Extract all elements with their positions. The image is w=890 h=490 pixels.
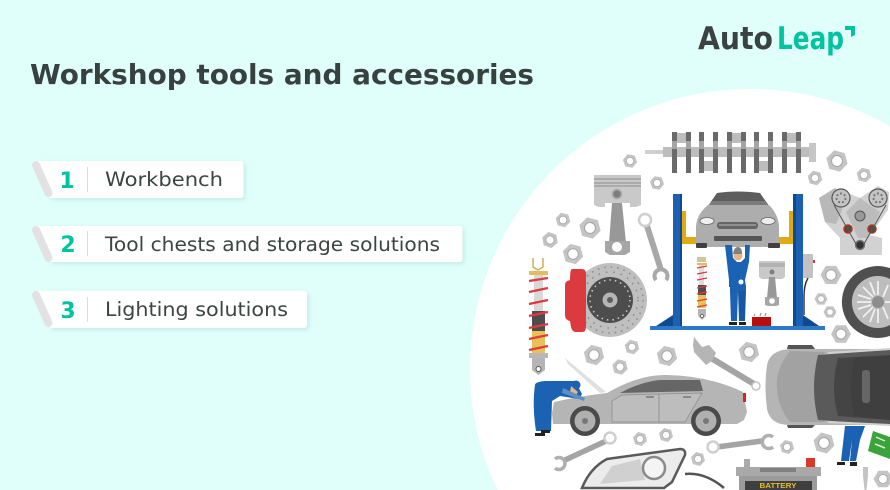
mechanic holding car xyxy=(725,245,750,325)
red toolbox xyxy=(752,313,771,326)
list item 3: Lighting solutions: Lighting solutions xyxy=(105,298,288,321)
list item 2: Tool chests and storage solutions: 2 xyxy=(60,233,76,258)
icon: adjustable wrench xyxy=(693,337,760,390)
icon: car lift with car and mechanic xyxy=(650,192,825,330)
icon: V engine xyxy=(819,186,889,255)
icon: crankshaft xyxy=(645,132,816,173)
list item 3: Lighting solutions xyxy=(36,291,307,328)
car front view xyxy=(696,192,780,248)
icon: large piston xyxy=(594,175,641,255)
icon: coil-over shock absorber xyxy=(529,258,548,375)
small shock absorber xyxy=(697,257,707,320)
icon: open-end wrench, bottom left xyxy=(555,432,616,469)
icon: tyre and alloy wheel xyxy=(842,266,890,338)
icon: probe at bottom right xyxy=(863,467,868,490)
list item 1: Workbench: Workbench xyxy=(105,168,223,191)
icon: small wrench xyxy=(639,214,668,280)
lift frame xyxy=(650,194,825,330)
logo: AutoLeap: Auto xyxy=(698,21,773,57)
title: Workshop tools and accessories xyxy=(30,58,534,91)
icon: car top view xyxy=(766,345,890,428)
icons: hex nuts xyxy=(540,149,890,487)
icon: car battery xyxy=(736,458,821,490)
logo: AutoLeap xyxy=(698,21,855,57)
list item 2: Tool chests and storage solutions xyxy=(36,226,462,262)
mechanic leaning under hood xyxy=(534,380,585,436)
white circle backdrop xyxy=(470,89,890,490)
icon: sedan with open hood xyxy=(552,358,747,436)
icon: open-end wrench, bottom centre xyxy=(708,436,773,452)
list item 1: Workbench xyxy=(36,161,244,198)
mechanic legs and green tool tray xyxy=(837,426,890,466)
icon: car battery: BATTERY xyxy=(760,481,796,490)
list item 1: Workbench: 1 xyxy=(59,169,75,194)
list item 3: Lighting solutions: 3 xyxy=(60,299,76,324)
icon: headlight xyxy=(582,449,724,488)
list item 2: Tool chests and storage solutions: Tool chests and storage solutions xyxy=(104,233,440,256)
logo: AutoLeap: Leap xyxy=(777,21,844,57)
icon: brake disc with red caliper xyxy=(565,263,647,337)
small piston xyxy=(759,261,785,306)
